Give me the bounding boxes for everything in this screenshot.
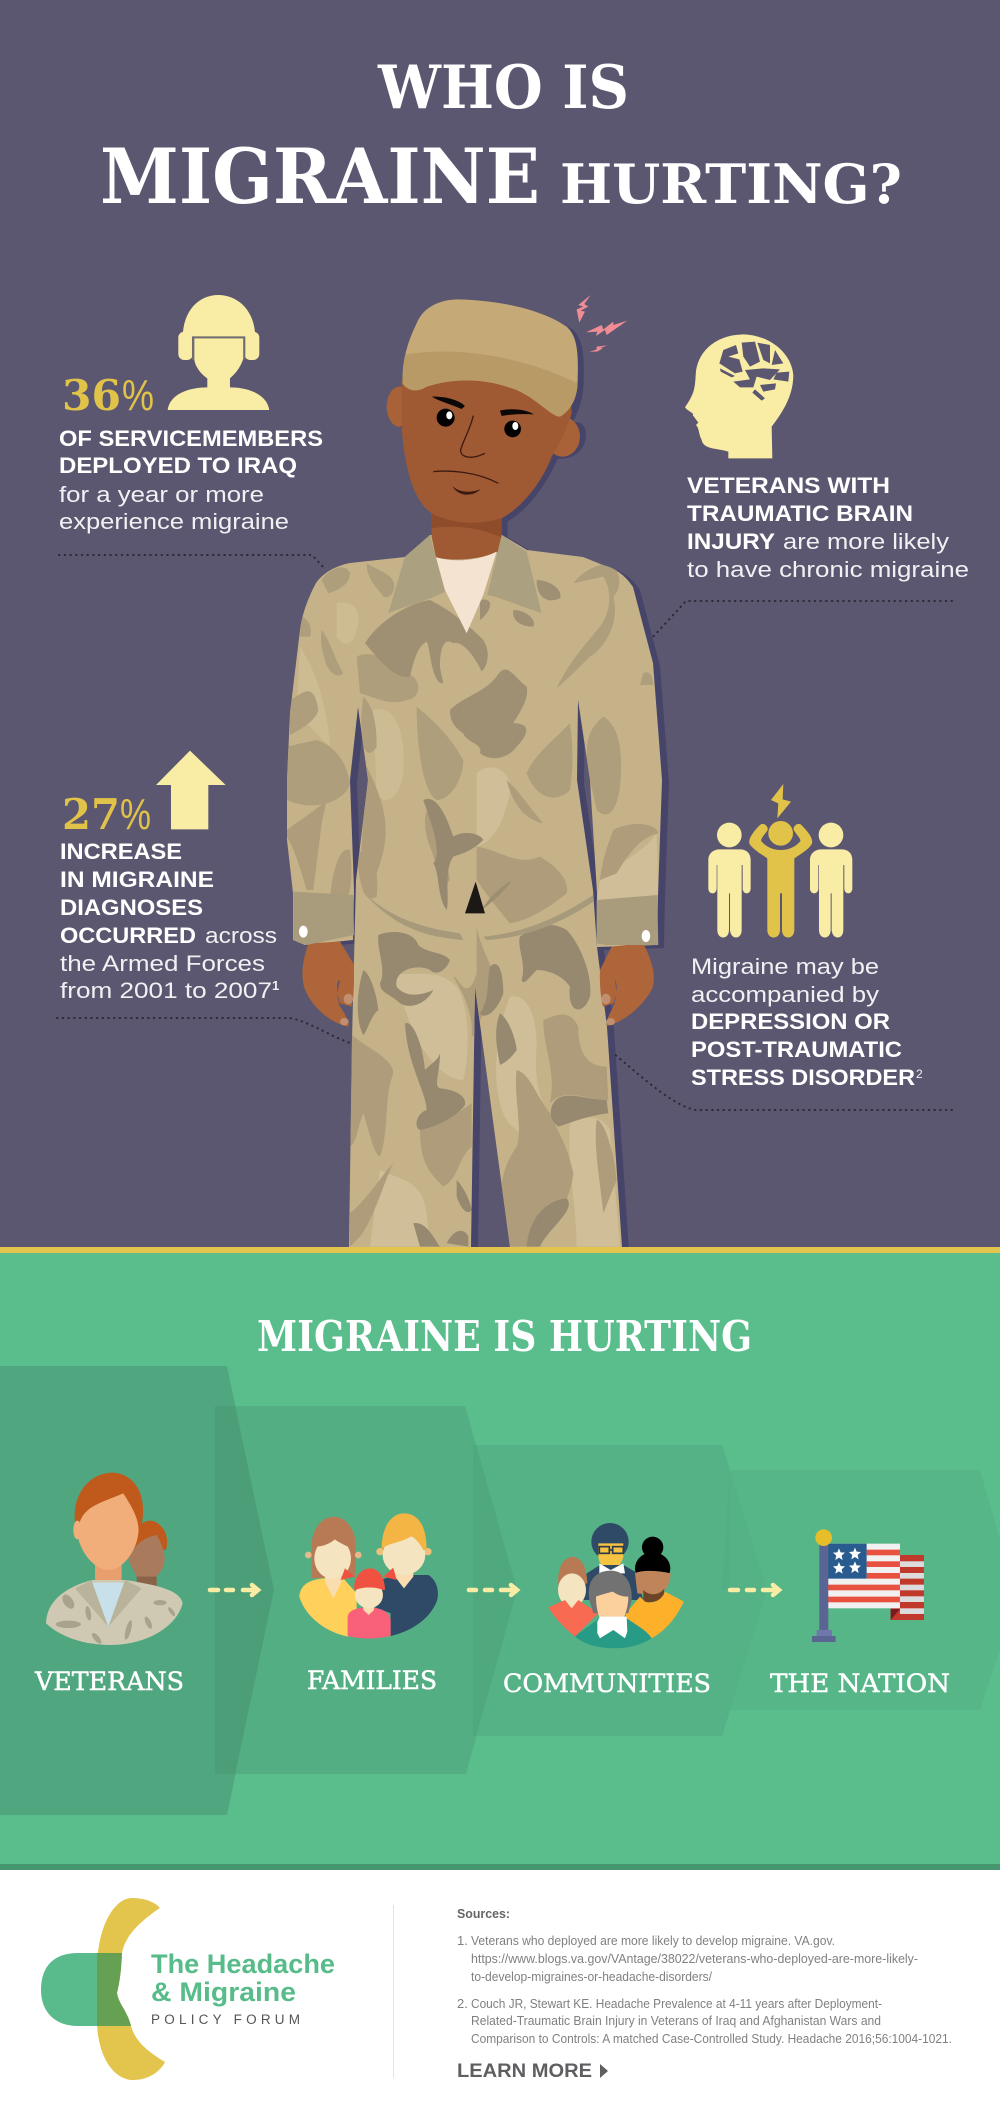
arrow 1 — [210, 1585, 258, 1595]
callout: 36% of servicemembers — [59, 295, 326, 570]
icon: head with brain — [685, 334, 793, 458]
callout: 36% of servicemembers: for a year or more — [59, 482, 264, 507]
callout: traumatic brain injury: VETERANS WITH — [687, 473, 890, 498]
arrow 2 — [469, 1585, 517, 1595]
chevron panels — [0, 1366, 1000, 1815]
icon: three people with headache — [708, 784, 852, 937]
eyes — [437, 409, 455, 427]
title — [100, 53, 902, 221]
logo mark — [41, 1898, 165, 2080]
logo wordmark: POLICY FORUM — [151, 2012, 300, 2027]
callout: traumatic brain injury: TRAUMATIC BRAIN — [687, 501, 913, 526]
sources: Couch JR, Stewart KE. Headache Prevalence at 4-11 years after Deployment- — [471, 1996, 882, 2011]
sources: 2. — [457, 1996, 468, 2011]
callout: depression or PTSD: Migraine may be — [691, 954, 879, 979]
callout: 27% increase: 1 — [272, 978, 279, 993]
sources: Sources: — [457, 1906, 510, 1921]
label: families: FAMILIES — [307, 1666, 437, 1695]
panel: purple soldier background — [0, 0, 1000, 1247]
callout: 36% of servicemembers: experience migraine — [59, 509, 289, 534]
panel: footer — [0, 1870, 1000, 2116]
icon: communities — [548, 1523, 684, 1648]
callout: traumatic brain injury: are more likely — [783, 529, 949, 554]
callout: 27% increase: % — [120, 790, 151, 839]
title: WHO IS — [377, 53, 629, 123]
icon: soldier helmet — [168, 295, 269, 410]
label: communities: COMMUNITIES — [503, 1669, 711, 1698]
icon: veterans — [46, 1473, 183, 1645]
icon: flag — [812, 1529, 924, 1642]
learn more link: LEARN MORE — [457, 2061, 592, 2082]
callout: 36% of servicemembers: DEPLOYED TO IRAQ — [59, 453, 297, 478]
logo — [41, 1898, 335, 2080]
callout: 27% increase: from 2001 to 2007 — [60, 978, 272, 1003]
sources — [457, 1906, 952, 2046]
logo wordmark — [151, 1949, 335, 2027]
collar and undershirt — [388, 535, 542, 633]
neck — [432, 507, 502, 560]
callout: depression or PTSD — [613, 784, 952, 1110]
cap — [403, 299, 578, 417]
callout: 36% of servicemembers: OF SERVICEMEMBERS — [59, 426, 323, 451]
eyebrows — [432, 397, 465, 409]
right hand — [600, 943, 654, 1026]
heading: migraine is hurting: MIGRAINE IS HURTING — [257, 1312, 752, 1361]
sources: Veterans who deployed are more likely to develop migraine. VA.gov. — [471, 1933, 835, 1948]
callout: 36% of servicemembers: % — [122, 371, 154, 420]
callout: 36% of servicemembers: 36 — [62, 371, 121, 420]
sources: Comparison to Controls: A matched Case-Controlled Study. Headache 2016;56:1004-1021. — [471, 2031, 952, 2046]
callout: 27% increase: 27 — [62, 790, 120, 839]
callout: 27% increase: OCCURRED — [60, 923, 196, 948]
callout: 27% increase: DIAGNOSES — [60, 895, 203, 920]
sources: to-develop-migraines-or-headache-disorders/ — [471, 1969, 712, 1984]
callout: traumatic brain injury: INJURY — [687, 529, 775, 554]
cuffs, belt and buckle — [293, 881, 658, 945]
icon: headache lightning — [577, 295, 627, 353]
callout: 27% increase: IN MIGRAINE — [60, 867, 214, 892]
ears — [387, 387, 580, 457]
logo wordmark: The Headache — [151, 1949, 335, 1979]
callout: depression or PTSD: 2 — [916, 1067, 923, 1081]
callout: traumatic brain injury: to have chronic migraine — [687, 557, 969, 582]
soldier shadow — [294, 302, 669, 1250]
soldier illustration — [287, 295, 669, 1250]
sources: 1. — [457, 1933, 468, 1948]
sources: Related-Traumatic Brain Injury in Veterans of Iraq and Afghanistan Wars and — [471, 2013, 881, 2028]
callout: depression or PTSD: STRESS DISORDER — [691, 1065, 915, 1090]
callout: 27% increase: the Armed Forces — [60, 951, 265, 976]
icon: families — [299, 1513, 438, 1638]
icon: up arrow — [156, 751, 226, 829]
callout: 27% increase: across — [205, 923, 277, 948]
nose — [461, 416, 485, 457]
label: veterans: VETERANS — [34, 1667, 184, 1696]
callout: depression or PTSD: DEPRESSION OR — [691, 1009, 890, 1034]
callout: depression or PTSD: accompanied by — [691, 982, 879, 1007]
left hand — [302, 942, 354, 1027]
title: MIGRAINE — [100, 132, 540, 221]
mouth — [433, 471, 498, 483]
sources: https://www.blogs.va.gov/VAntage/38022/veterans-who-deployed-are-more-likely- — [471, 1951, 918, 1966]
label: the nation: THE NATION — [770, 1669, 950, 1698]
callout: 27% increase: INCREASE — [60, 839, 182, 864]
callout: 27% increase — [57, 751, 350, 1043]
head — [387, 295, 627, 560]
uniform base — [287, 535, 662, 1247]
title: HURTING? — [560, 152, 902, 216]
uniform camouflage — [287, 563, 658, 1247]
logo wordmark: & Migraine — [151, 1977, 296, 2007]
panel: green section — [0, 1247, 1000, 1870]
face — [402, 380, 572, 523]
callout: traumatic brain injury — [652, 334, 969, 638]
arrow 3 — [730, 1585, 779, 1595]
callout: depression or PTSD: POST-TRAUMATIC — [691, 1037, 902, 1062]
